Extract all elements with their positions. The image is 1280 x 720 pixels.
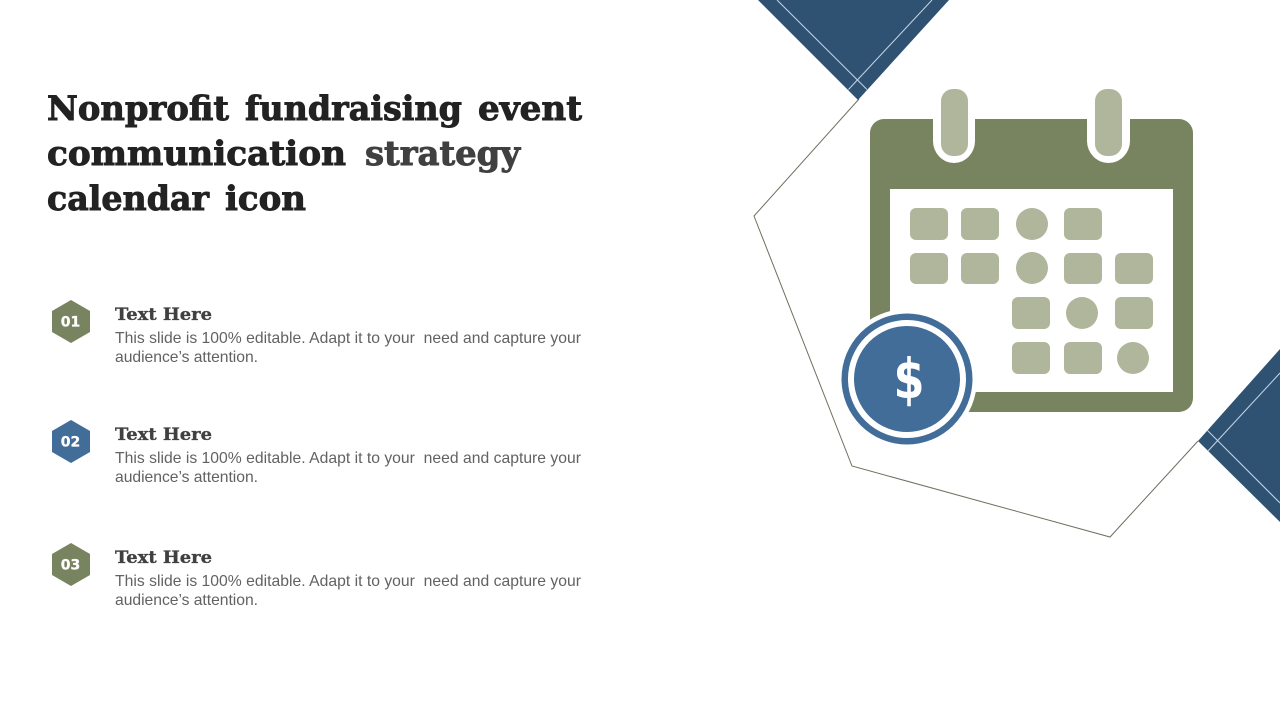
title: communication bbox=[47, 134, 346, 173]
right blue diamond bbox=[1198, 349, 1280, 522]
title: Nonprofit bbox=[47, 89, 230, 128]
description 02 bbox=[115, 450, 581, 486]
top blue diamond bbox=[758, 0, 949, 100]
calendar page bbox=[890, 189, 1173, 392]
icon: calendar bbox=[870, 89, 1193, 412]
title: strategy bbox=[365, 134, 522, 173]
heading 03: Text Here bbox=[115, 548, 212, 567]
heading 01: Text Here bbox=[115, 305, 212, 324]
description 03: audience’s attention. bbox=[115, 592, 258, 609]
right binder ring bbox=[1087, 89, 1130, 163]
hexagon badge 02: 02 bbox=[61, 434, 80, 450]
description 03: This slide is 100% editable. Adapt it to your need and capture your bbox=[115, 573, 581, 590]
icon: dollar coin: $ bbox=[894, 347, 924, 411]
hexagon badge 01 bbox=[52, 300, 90, 343]
title: fundraising bbox=[245, 89, 462, 128]
title bbox=[47, 89, 583, 218]
hexagon badge 02 bbox=[52, 420, 90, 463]
title: icon bbox=[225, 179, 306, 218]
list item 03 bbox=[52, 543, 581, 609]
thin polygon outline bbox=[754, 99, 1198, 537]
description 01: audience’s attention. bbox=[115, 349, 258, 366]
description 02: This slide is 100% editable. Adapt it to your need and capture your bbox=[115, 450, 581, 467]
calendar date cells bbox=[910, 208, 1153, 374]
calendar body bbox=[870, 119, 1193, 412]
description 01 bbox=[115, 330, 581, 366]
description 03 bbox=[115, 573, 581, 609]
hexagon badge 03: 03 bbox=[61, 558, 80, 574]
title: calendar bbox=[47, 179, 209, 218]
heading 02: Text Here bbox=[115, 425, 212, 444]
description 02: audience’s attention. bbox=[115, 469, 258, 486]
hexagon badge 03 bbox=[52, 543, 90, 586]
list item 02 bbox=[52, 420, 581, 486]
left binder ring bbox=[933, 89, 975, 163]
description 01: This slide is 100% editable. Adapt it to your need and capture your bbox=[115, 330, 581, 347]
hexagon badge 01: 01 bbox=[61, 314, 80, 330]
icon: dollar coin bbox=[837, 309, 977, 449]
title: event bbox=[478, 89, 583, 128]
list item 01 bbox=[52, 300, 581, 366]
